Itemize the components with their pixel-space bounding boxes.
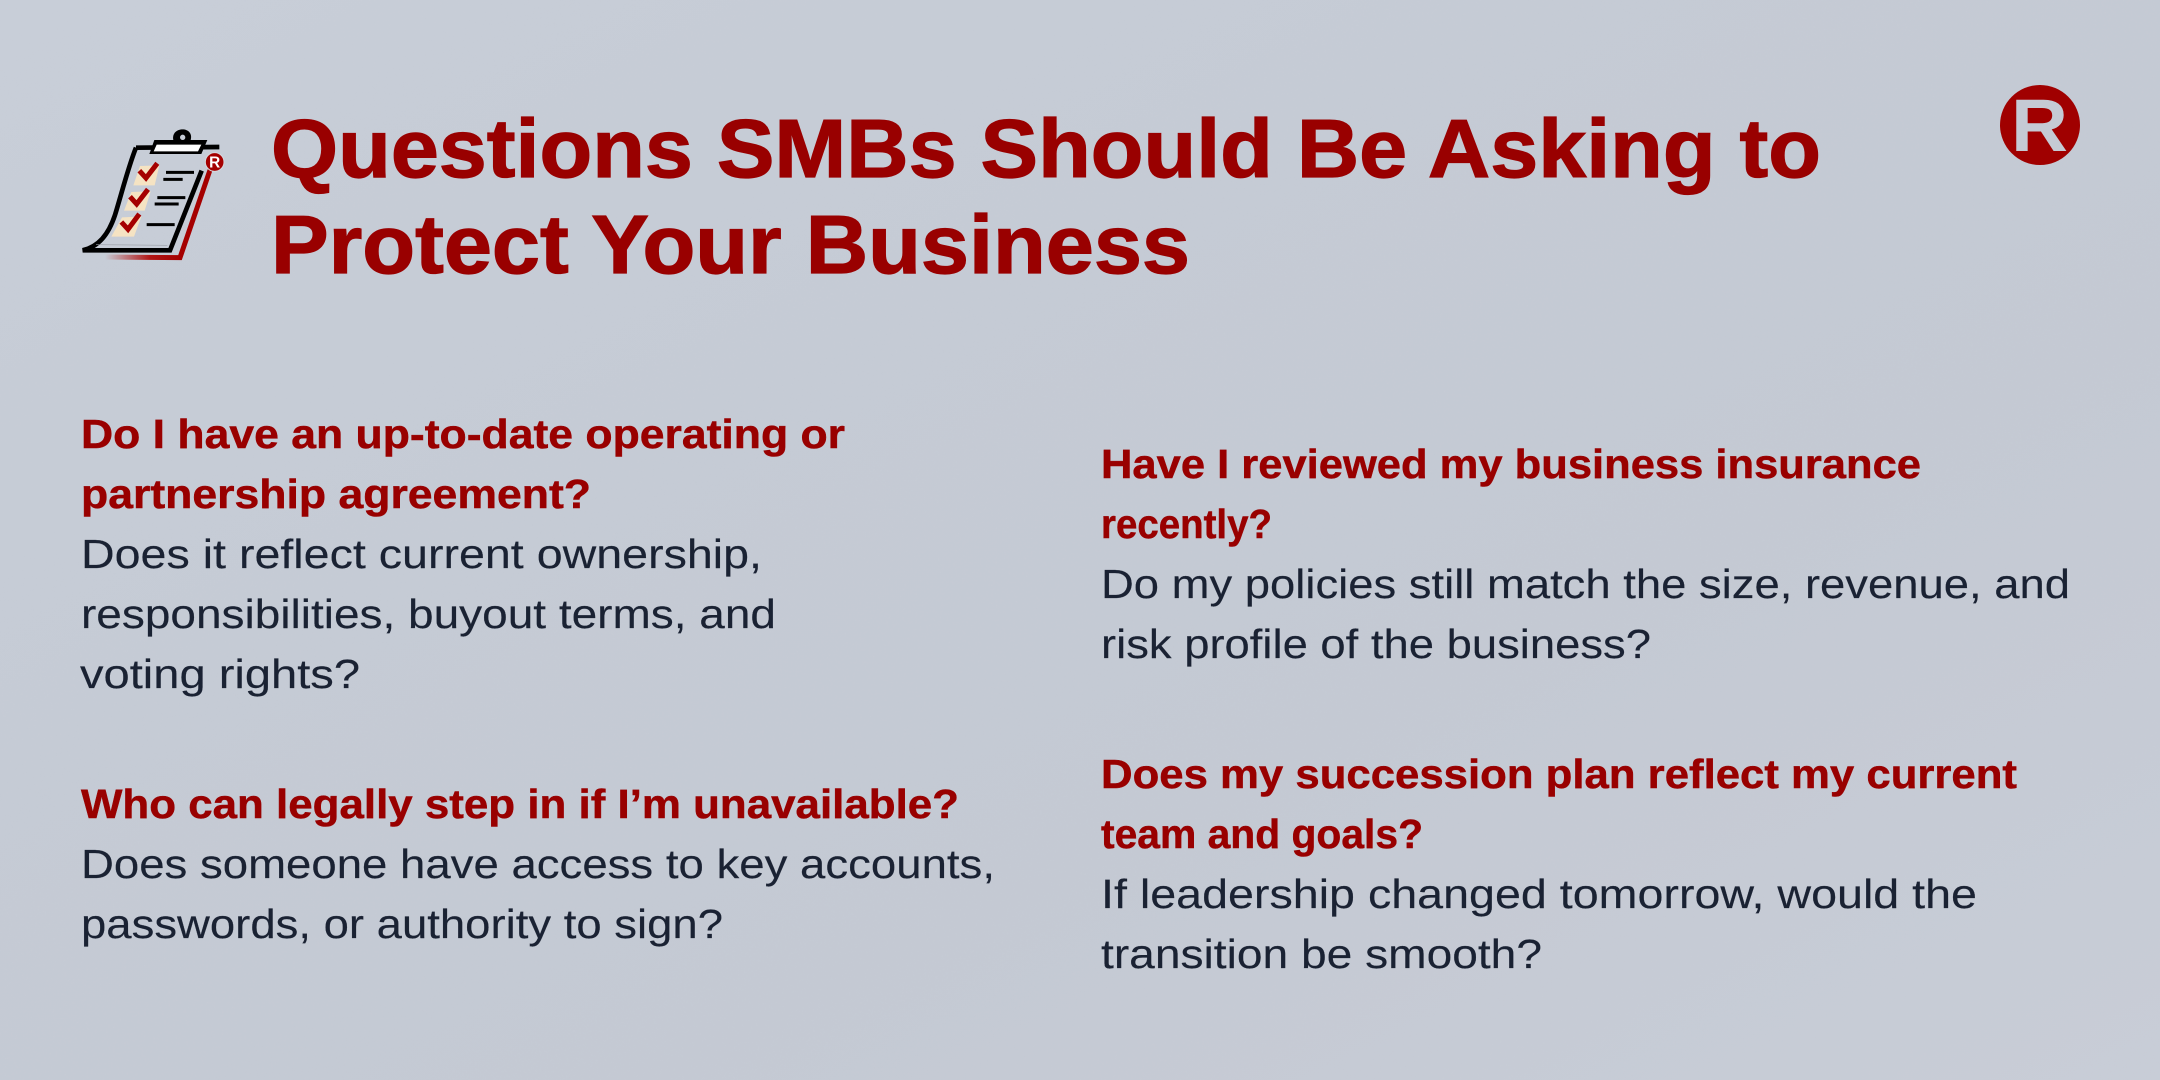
mini logo badge: [205, 153, 224, 172]
question block: succession plan: [1101, 751, 2017, 977]
logo: R badge: R: [2011, 84, 2068, 167]
question block: operating agreement: partnership agreement?: [81, 471, 591, 517]
question block: business insurance: Have I reviewed my business insurance: [1101, 441, 1921, 487]
logo: R badge: [2000, 84, 2080, 167]
question block: operating agreement: Do I have an up-to-date operating or: [81, 411, 845, 457]
title: Questions SMBs Should Be Asking to: [271, 102, 1821, 195]
question block: legal authority: Who can legally step in if I’m unavailable?: [81, 781, 959, 827]
checklist row 2: [124, 189, 185, 211]
question block: legal authority: Does someone have access to key accounts,: [81, 841, 995, 887]
question block: succession plan: team and goals?: [1101, 811, 1423, 857]
question block: business insurance: Do my policies still match the size, revenue, and: [1101, 561, 2070, 607]
question block: operating agreement: voting rights?: [80, 651, 360, 697]
question block: operating agreement: responsibilities, buyout terms, and: [81, 591, 776, 637]
question block: business insurance: [1101, 441, 2070, 667]
question block: legal authority: [81, 781, 995, 947]
question block: succession plan: transition be smooth?: [1101, 931, 1542, 977]
icon: clipboard checklist: [83, 129, 224, 258]
clipboard clip: [149, 129, 207, 154]
question block: succession plan: If leadership changed tomorrow, would the: [1101, 871, 1977, 917]
checklist row 1: [133, 163, 194, 185]
question block: business insurance: risk profile of the business?: [1101, 621, 1651, 667]
question block: operating agreement: Does it reflect current ownership,: [81, 531, 762, 577]
checklist row 3: [111, 214, 175, 237]
question block: succession plan: Does my succession plan reflect my current: [1101, 751, 2017, 797]
title: Protect Your Business: [271, 198, 1190, 291]
mini logo badge: R: [209, 155, 220, 172]
question block: operating agreement: [80, 411, 845, 697]
title: [271, 102, 1821, 291]
question block: business insurance: recently?: [1101, 501, 1272, 547]
question block: legal authority: passwords, or authority to sign?: [81, 901, 723, 947]
